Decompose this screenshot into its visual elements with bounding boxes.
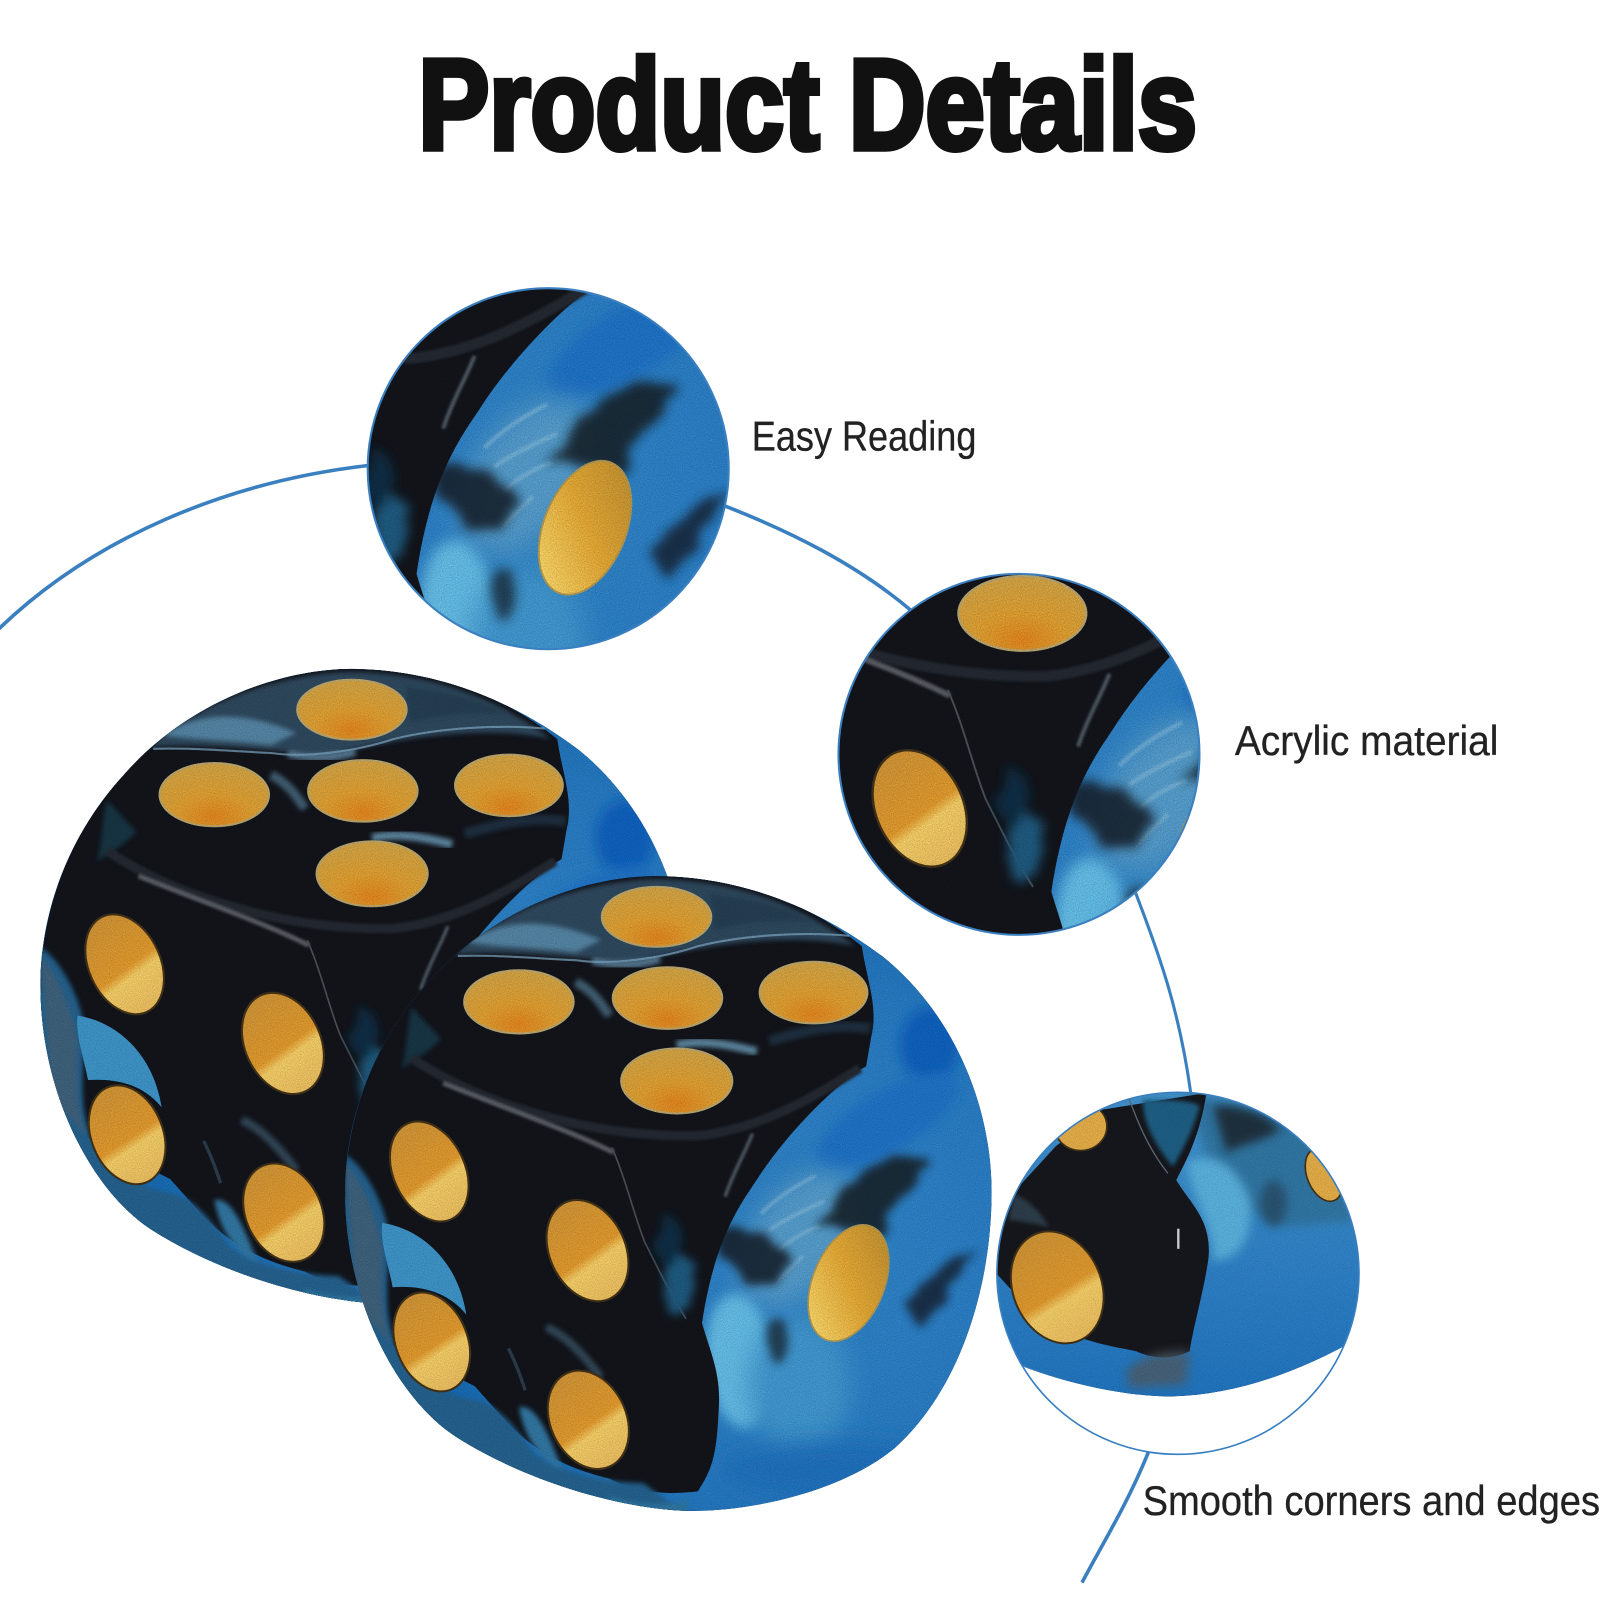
front die bbox=[340, 876, 992, 1525]
callout circle: easy reading magnified pip bbox=[368, 289, 728, 648]
connector arc bbox=[0, 466, 1191, 1583]
label: easy reading: Easy Reading bbox=[752, 412, 976, 459]
title: Product Details bbox=[418, 34, 1197, 177]
callout circle: smooth corners and edges bbox=[998, 1093, 1358, 1452]
callout circle: acrylic material corner bbox=[840, 574, 1198, 934]
callout ring 2 bbox=[838, 574, 1199, 935]
callout ring 1 bbox=[368, 288, 729, 649]
back die bbox=[35, 669, 687, 1318]
label: acrylic material: Acrylic material bbox=[1235, 717, 1498, 764]
callout ring 3 bbox=[997, 1092, 1359, 1454]
